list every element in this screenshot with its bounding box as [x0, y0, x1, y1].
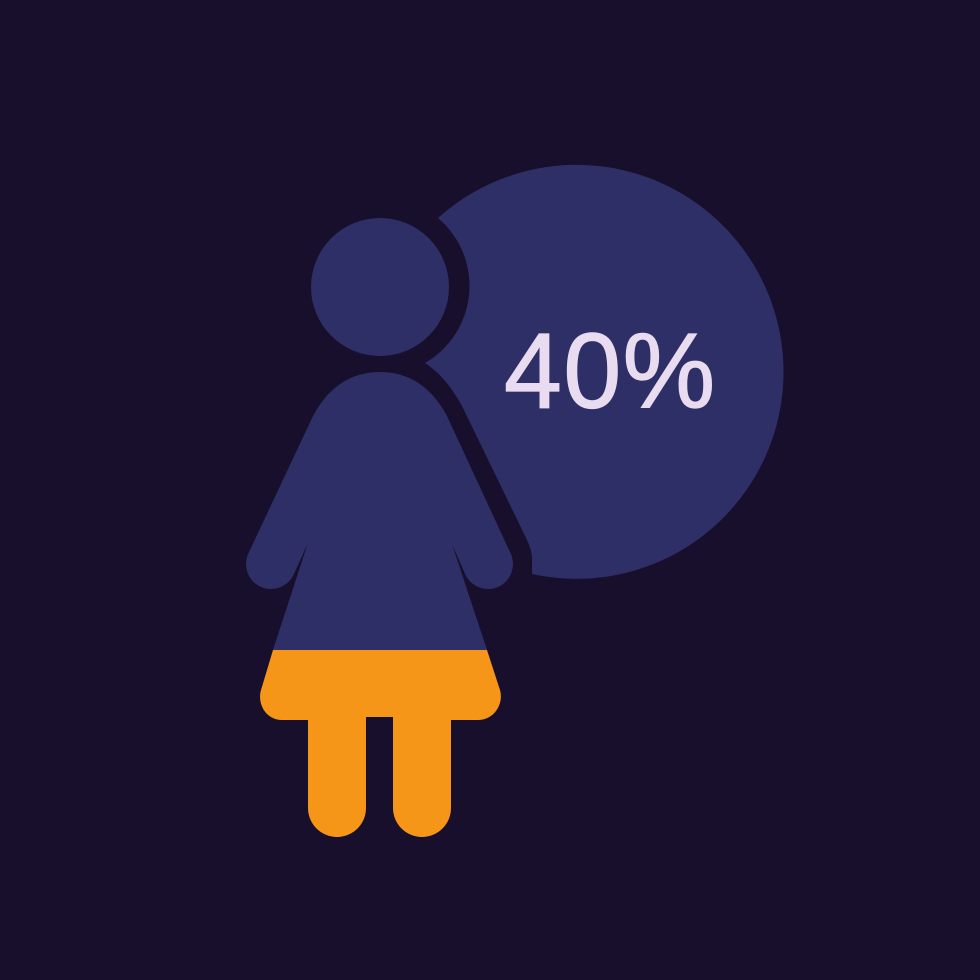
pie chart: 40 percent circle behind figure — [425, 165, 784, 579]
icon: woman figure — [246, 218, 513, 837]
figure head — [311, 218, 449, 356]
figure lower portion: orange highlighted share — [260, 650, 501, 837]
figure body: navy upper portion — [246, 372, 513, 650]
percentage label: 40% — [504, 311, 717, 431]
